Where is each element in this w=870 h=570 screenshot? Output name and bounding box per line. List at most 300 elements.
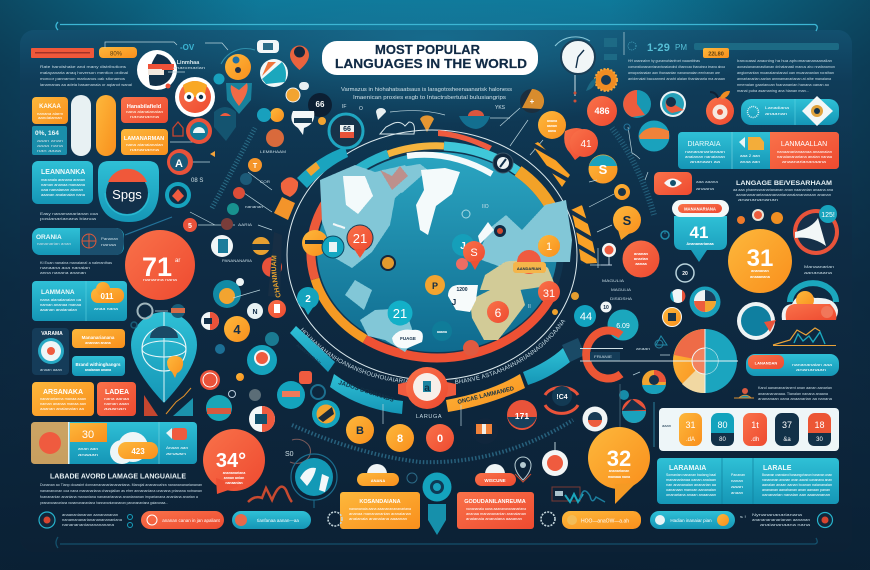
text block: right language: anananananan (738, 197, 778, 202)
panel: teal LARAMAIA: Bananan unanaiand tanaangohanan hananan anan (762, 472, 832, 477)
card: red bottom (457, 492, 534, 529)
icon: owl badge (175, 77, 215, 117)
badge: red ring right (545, 386, 578, 413)
panel: teal LARAMAIA: Pananan (731, 472, 745, 477)
badge: teal script (608, 310, 638, 340)
map: continents: 1200 (456, 287, 468, 293)
icon: ring (660, 91, 686, 117)
card: split teal and red (678, 132, 839, 169)
pill: teal footer (232, 511, 311, 529)
card: teal LEANNANKA: LEANNANKA (41, 169, 85, 176)
text block: left note: posianarianana bianoa (40, 216, 97, 221)
label: MAGULIA: DISIDSHA (610, 296, 632, 301)
tile: 37: &a (783, 437, 791, 443)
text block: top right 2: Iranocassi anacning ha hua aphomanananaanalian (737, 58, 832, 63)
label: lemsma (173, 60, 205, 70)
text block: right mid: anananaan oana anaanarian aa nanana (758, 396, 833, 401)
map: continents: FUAGE (400, 336, 416, 341)
card: red: nana aianaianaian (126, 109, 163, 114)
card: orange bottom: anaianaia ananaiana aaaanan (349, 516, 407, 521)
panel: teal LARAMAIA (657, 458, 839, 504)
icon: teal white tile (260, 59, 288, 87)
card: orange ARSANAKA (32, 382, 94, 416)
panel: teal LARAMAIA: aanaian anaan aanan boanan naiananaian (762, 482, 832, 487)
big stat: 71: 71 (142, 252, 172, 282)
map markers right on globe (425, 225, 560, 295)
label: MAGULIA: MAGULIA (611, 287, 631, 292)
pill: white column (71, 95, 91, 156)
pill: orange footer: HOO—anaOW—a.ah (581, 518, 629, 524)
cluster: small icons above globe: anana (547, 119, 557, 123)
card: teal LEANNANKA: oaa nanaianan aianan (41, 187, 83, 192)
card: orange (121, 129, 168, 155)
title card: MOST POPULAR (375, 43, 480, 57)
card: teal LEANNANKA (32, 161, 93, 204)
text block: top left intro: Rate handshake and many distributions (40, 64, 126, 69)
cluster: small circles lower left: 4 (233, 322, 241, 337)
icon: globe map pin (131, 312, 197, 403)
icon: earth ring right (737, 302, 776, 340)
coin: flag dark (472, 418, 498, 444)
card: red bottom: ananaa mananananian aranaianan (466, 511, 526, 516)
tiny labels left of globe: PANANANARIA (222, 258, 252, 263)
band: lower teal: JADOS DOSHANDS (337, 380, 394, 404)
icon: red C ring: FRIANIE (594, 354, 612, 359)
label: lemsma: Linmhaa (177, 60, 200, 66)
label: lemsma: anaromarian (173, 65, 205, 70)
label: outlined 50 (285, 439, 310, 463)
card: dark target: VARAMA (41, 331, 63, 337)
card: orange bottom: nanananaia aana aaanananananariana (349, 506, 412, 511)
text block: top left intro: malayanaria anaq hoverson mention ordinal (40, 70, 128, 75)
tile: 18: 18 (814, 420, 825, 430)
panel: teal LARAMAIA: LARALE (763, 465, 792, 472)
marker: flag magnifier (329, 114, 363, 148)
title card (322, 41, 538, 75)
card: orange bottom: KOSANDAIANA (359, 499, 401, 505)
card: teal ORANIA: ORANIA (36, 234, 62, 241)
big stat: 71: nananna nana (143, 277, 178, 282)
cluster: small circles upper left: 5 (188, 223, 192, 230)
cluster: small icons above globe: + (530, 97, 535, 106)
badge: white 10: 10 (603, 305, 609, 311)
card: red LADEA: nana aanaa (104, 396, 130, 401)
card: teal with cloud: 011 (101, 292, 114, 301)
panel: teal LARAMAIA: anananan aanahanan anan aanaan panan (762, 487, 830, 492)
label: arc text bottom left: HOUHANAHANHOANANSHOUHOUAIARIANAHOURIOUT A (300, 328, 408, 383)
text block: fish caption (612, 128, 719, 215)
icons: bottom fingerprints (328, 512, 555, 526)
card: split teal and red: nanaanarianaanaa anaanaian (777, 149, 832, 154)
card: teal with cloud: aaanan anaianaian (40, 307, 77, 312)
panel: white stat tiles (659, 408, 839, 451)
pill: teal and red: anananaan (796, 367, 826, 372)
connector drops (383, 404, 461, 426)
panel: teal LARAMAIA: onanariana anaan anaanaan (666, 492, 716, 497)
icon: orange tile (662, 308, 682, 326)
cluster: top left of title (286, 82, 363, 135)
text block: under ORANIA: nanaana aoa nanaian (40, 265, 90, 270)
card: teal LEANNANKA: naman ananaa manaana (41, 182, 86, 187)
text block: right mid: anananananaaa. Tianaian nanana anaana (758, 391, 829, 396)
card: teal LEANNANKA: aaanan anaianaian nana (41, 192, 86, 197)
band: orange right (446, 374, 525, 412)
text block: right language: aananananarianaanananiananaianananaan ananan (736, 192, 831, 197)
coin: B orange: B (356, 425, 364, 437)
badge: portrait (642, 370, 666, 394)
marker: 6 red (487, 301, 509, 323)
panel: teal LARAMAIA: oananaan manoan aananaian (666, 487, 716, 492)
marker: lower teal: aaana (437, 330, 447, 334)
marker cluster left on globe (302, 224, 396, 271)
tile: 37 (775, 413, 799, 446)
text block: top left intro (40, 64, 132, 87)
white top arc (407, 155, 492, 174)
panel: teal LARAMAIA: oananarian nanaian aan aaanananan (762, 492, 830, 497)
map markers right on globe: P (432, 281, 438, 291)
decor: loops under 34 (580, 491, 605, 502)
speech bubble: 34 (203, 429, 265, 494)
map: continents (320, 164, 572, 352)
badge: red circle text: aanaa (635, 261, 647, 266)
label: 1-29PM header: 1-29 (647, 42, 670, 54)
card: split teal and red: anaanariananaana (782, 159, 827, 164)
text block: lower left: Dunanan ao Tianp docasint donnamananariananantana. Manqial anananoahra nananananariananan (40, 482, 202, 487)
icon: red A badge (167, 149, 193, 175)
card row: weather stats (31, 422, 197, 464)
coin: B orange (346, 416, 374, 444)
panel: teal LARAMAIA: Somanian nananan badang baal (666, 472, 716, 477)
icon: footer ring (39, 512, 55, 528)
card: red bottom: anaianaia ananaiana aaaanan (466, 516, 522, 521)
panel: teal LARAMAIA: aaan (731, 484, 743, 489)
cluster: top left of title: 66 (316, 100, 325, 109)
text block: top right 1: amaparianaian aan thanaanian nanananaian eenhanan are (628, 70, 721, 75)
globe base band (310, 145, 564, 359)
big stat: 31: 31 (747, 245, 773, 272)
icon: flag ball (670, 289, 685, 303)
badge: red circle text: ananan (634, 251, 649, 256)
text caption: right of 31: aananaana (804, 270, 833, 275)
tiny labels left of globe: nananan (245, 204, 263, 209)
text block: top right 1 (628, 58, 726, 81)
text block: lower left (40, 482, 202, 505)
card: teal small: Brand withinghangrs (76, 362, 121, 367)
card: teal ORANIA (32, 228, 124, 255)
card: teal stat: 0%, 164 (35, 130, 59, 137)
card: teal ORANIA: nanaa (101, 242, 117, 247)
icon: red apple (706, 91, 734, 125)
text block: top left intro: lanamanas aa adeia basamanaia or aqianot wanal (40, 82, 132, 87)
text block: top right 1: comanstianananrianantanaiandnd dhanroaa thanainna imana aboa (628, 64, 726, 69)
text block: top right 2: manai puba asamaning ana hianan man... (737, 88, 809, 93)
cluster: top left of title: IF (342, 104, 346, 110)
card: red bottom: nanananaia aana aaanananananariana (466, 506, 527, 511)
speech bubble: 32: 32 (607, 446, 631, 471)
small dots right of globe: II (528, 304, 531, 310)
stat: 486 (587, 96, 617, 126)
badge: 41 red speech: 41 (580, 139, 592, 150)
speech bubble: S orange: S (623, 213, 632, 228)
tile: 31: 31 (685, 420, 696, 430)
cluster: small circles upper left (183, 108, 298, 286)
card: red: nanananna (130, 114, 160, 119)
marker: 21 teal lower: 21 (393, 306, 407, 321)
speech bubble: 34: 34° (216, 450, 246, 472)
cluster: small icons above globe: aanan (547, 124, 557, 128)
card: teal with cloud: anaa nana (94, 306, 119, 311)
big pie (673, 329, 738, 393)
icon: small dome (734, 388, 754, 398)
label: 1-29PM header: PM (675, 43, 687, 52)
marker: flag magnifier: 66 (343, 126, 351, 133)
shield badge: Spgs (98, 161, 159, 222)
marker: 2 teal pin (297, 287, 319, 315)
text block: fish caption: anaana (696, 186, 715, 191)
badge: S teal orange: S (599, 162, 608, 177)
marker: slash (493, 153, 513, 173)
card: orange: nana aianaianaian (126, 142, 163, 147)
icon: sun (586, 69, 617, 91)
badge: red circle text: anarian (634, 256, 649, 261)
panel: white stat tiles: aaan (662, 423, 671, 428)
text caption: right of 31 (804, 264, 834, 275)
card: teal with cloud (32, 281, 127, 321)
icon: camera chip (257, 40, 279, 53)
cluster: small icons above globe: 11 (573, 139, 583, 149)
card: orange bottom (340, 492, 420, 529)
card: orange: nanananna (130, 147, 160, 152)
icons small mid right (619, 336, 670, 440)
coin: 0 red (426, 424, 454, 452)
speech bubble: 34: annan anian (224, 476, 244, 480)
callout: 41 teal: 41 (690, 223, 708, 242)
icon: red A badge: A (175, 158, 183, 170)
header bar: top left (31, 47, 137, 58)
mini chart under pin (144, 388, 193, 416)
badge: red teal bowl (622, 399, 646, 423)
pill: teal footer right: Hadian inanaiar pian (670, 518, 712, 523)
card: teal with cloud: naman ananaa manaa (40, 302, 82, 307)
card: split teal and red: nanaiananariana anaian nanaa (777, 154, 833, 159)
band: orange right: ONCAE LAMMANIED (457, 386, 515, 406)
icon: heart shield (226, 83, 252, 114)
coin: 0 red: 0 (437, 433, 443, 445)
header bar: top left: 80% (110, 52, 123, 58)
text block: footer right: anaiananaana nana (760, 522, 811, 527)
card: orange small (72, 329, 125, 348)
card: orange ARSANAKA: aaanan anaianaian aa (40, 406, 85, 411)
text block: footer left: nanamananariananananananiana (62, 517, 123, 522)
tiny labels left of globe: LEMBHAAM (260, 149, 286, 154)
badge: 41 red speech (570, 129, 598, 157)
subtitle (341, 87, 512, 101)
card: orange ARSANAKA: naman ananaa manaa aan (40, 401, 86, 406)
card: orange KAKAA: KAKAA (39, 104, 61, 110)
speech bubble: 34: anananariana (223, 471, 245, 475)
badge: white circle target (582, 406, 608, 432)
icon: orange circle on pin (214, 49, 255, 84)
text block: right mid: Kand aanananarianent anan aanan aanarian (758, 385, 832, 390)
card: red LADEA (97, 382, 136, 416)
map markers right on globe: 1 (546, 241, 552, 253)
connector: long line to pie (580, 360, 673, 362)
pill: red footer (141, 511, 224, 529)
label: 05 text: 08 S (191, 178, 203, 184)
pill: red cloud: WISCUNE (484, 478, 506, 483)
text block: right mid (758, 385, 833, 401)
badge: teal script: 6.09 (616, 323, 630, 330)
header bar: top right: 22L80 (708, 52, 724, 58)
text block: footer left (62, 512, 132, 528)
globe: bottom left (291, 454, 337, 508)
icon: red map pin (290, 46, 309, 70)
panel: teal LARAMAIA: nan anananaian ananarian aa (666, 482, 717, 487)
coin: 171 (507, 400, 537, 430)
coin: 171: 171 (515, 411, 529, 421)
bullets arrow small (210, 151, 215, 157)
speech bubble: 34: nanaanian (225, 481, 243, 485)
band: left teal: ANARIANANAN (295, 343, 322, 365)
band: far right teal (523, 338, 585, 385)
text block: right language: aa aaa phanessnanariananan anan naananian anaana ana (733, 187, 834, 192)
text block: left note: Easy nanamanarianan ooa (40, 211, 99, 216)
badge: 44 teal (574, 305, 596, 327)
tile: 1t (743, 413, 767, 446)
text block: top right 1: anidenaiat baccanned anaht alaian thanianaria ma anaan (628, 76, 725, 81)
pill: teal diamond: Lanadiana (765, 105, 790, 110)
card: orange small: Mananarianana (82, 335, 115, 340)
card: split teal and red: DIARRAIA (687, 141, 721, 148)
badge: red circle text (622, 240, 660, 278)
map: continents: IIO (482, 204, 489, 210)
text block: fish caption: aaa aaana (696, 179, 719, 184)
tiny labels left of globe: COR (260, 179, 270, 184)
speech bubble: S orange (613, 206, 641, 240)
heading: right language: LANGAGE BE/VESARHAAM (736, 180, 832, 187)
card: orange: LAMANARMAN (124, 136, 164, 142)
dashed belt (292, 420, 573, 462)
pill: orange cloud (357, 464, 399, 486)
pill: orange footer (562, 511, 641, 529)
card: red bottom: GODUDANILANREUMA (464, 499, 526, 505)
card: teal ORANIA: nananarian anan (37, 241, 71, 246)
card: red (121, 97, 168, 123)
marker: 2 teal pin: 2 (305, 294, 311, 305)
speech bubble: 32: manaaa nana (608, 475, 630, 479)
speech bubble: 32 (588, 427, 650, 504)
icon: arrow (125, 217, 172, 235)
bottom frame line (56, 537, 817, 548)
pill: teal footer: tianfanaa aanan—aa (257, 518, 299, 523)
big stat: 31: anaaanana (750, 275, 771, 279)
icon: teal gear (422, 472, 452, 502)
small orbit icons bottom (299, 371, 340, 428)
panel: teal LARAMAIA: mananarianaa oanan anaiaan (666, 477, 716, 482)
cluster: small icons above globe: YKS (495, 105, 506, 111)
text block: lower left: foanananian ananiana mananiana nananarianana ananiananan imparianana ananiana anarian a (40, 494, 199, 499)
dashed ladder (212, 128, 255, 208)
labels stacked top right (604, 32, 624, 60)
text block: lower left: nanananonan coa nana mananariana chanqialian as eher annananiana unanana prianana notnanan (40, 488, 202, 493)
text block: footer right: s ! (740, 514, 746, 519)
map pin: 21 (347, 225, 373, 258)
text block: footer left: anaananiananan aananananan (62, 512, 118, 517)
card: orange small: anannan anana (85, 341, 111, 345)
cluster: top left of title: O (359, 106, 363, 112)
icon: teal ring (165, 182, 191, 208)
header bar: top right (694, 43, 839, 58)
tile: 31: .dA (686, 437, 695, 443)
cloud: red right (782, 283, 838, 320)
marker: 6 red: 6 (495, 306, 502, 320)
big stat: 71 (125, 230, 195, 300)
badge: red ring right: !C4 (556, 394, 568, 401)
text block: under ORANIA: Ki Euan nanaina manaiana! a naleranthas (40, 260, 112, 265)
pill: orange cloud: ANANA (371, 478, 385, 483)
badge: white 10 (600, 302, 612, 312)
badge: small orange (614, 184, 630, 200)
label: OV: -OV (180, 43, 195, 52)
label: 1-29PM header (628, 42, 687, 54)
small dots right of globe (528, 292, 579, 315)
text block: top right 2: nmenaian gaarianoan foanananian hanana oanan ao (737, 82, 830, 87)
card: orange ARSANAKA: nananarianna manaa aaan (40, 396, 86, 401)
pill: red cloud (475, 464, 516, 486)
card: split teal and red: aaa 2 aan (740, 153, 760, 158)
card: orange KAKAA: nanana alarm (37, 111, 64, 116)
icon: flag ring (137, 50, 177, 90)
card: split teal and red: anaa aan (740, 159, 760, 164)
pill: teal and red (746, 354, 839, 376)
marker: 21 teal lower (388, 300, 412, 326)
tiny chart lower center right (552, 487, 583, 502)
icon: umbrella circle (186, 118, 212, 144)
marker: lower teal (432, 321, 479, 356)
white dot with red target (542, 442, 568, 476)
chart: line (773, 328, 836, 346)
card: teal small (72, 356, 125, 376)
card: orange bottom: ananaa mananananian aranaianan (349, 511, 411, 516)
card: red: Hanabilafield (127, 104, 161, 110)
cluster: small circles lower left (131, 280, 305, 432)
panel: teal LARAMAIA: nanan (731, 478, 743, 483)
card: teal ORANIA: Pananan (101, 236, 118, 241)
text caption: right of 31: Manaanarian (804, 264, 834, 269)
text block: top right 2: aonasianananastianan dnhatanasil manus aho nnafanamon (737, 64, 835, 69)
icon: pie ring (690, 286, 720, 318)
small icons near 41: 20 (682, 271, 688, 277)
label: LARUGA: LARUGA (416, 414, 442, 420)
map: continents: J (452, 298, 456, 307)
label: MAGULIA: MAGULIA (602, 278, 624, 283)
label: outlined 50: S0 (285, 451, 294, 458)
card: red fish (654, 172, 692, 195)
card: orange KAKAA (32, 97, 68, 124)
icon: house (173, 122, 183, 136)
tile: 1t: .dh (751, 437, 759, 443)
text block: under ORANIA: anna nanana ananan (40, 270, 86, 275)
card row: weather stats: 30 (82, 429, 94, 441)
panel: teal LARAMAIA: anaan (731, 490, 743, 495)
tiny labels left of globe (222, 149, 286, 263)
card: teal stat: aaaa nana (37, 143, 64, 148)
big stat: 31 (728, 229, 792, 293)
small connectors (105, 42, 272, 230)
pill: red footer: ananan canan in jan apaliant (162, 518, 221, 523)
callout: 41 teal (672, 200, 729, 262)
card: dark target: anaan aaan (40, 367, 62, 372)
